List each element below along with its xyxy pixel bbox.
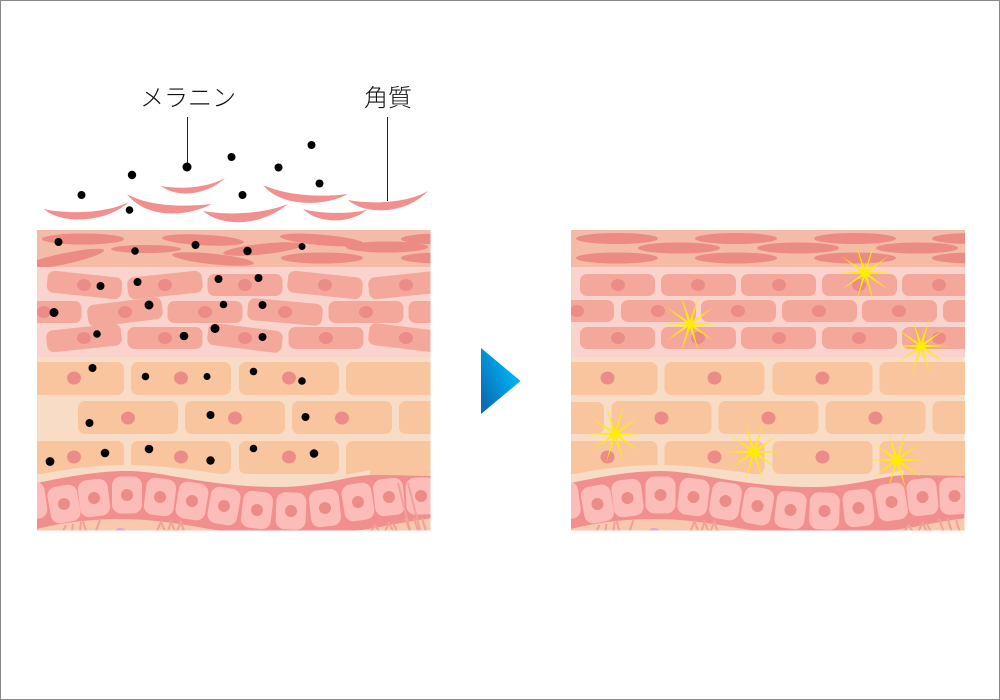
label: melanin: メラニン — [140, 85, 236, 112]
leader line: flakes — [386, 117, 388, 201]
extra granular cell at left edge — [571, 402, 604, 434]
horny layer band — [37, 230, 430, 267]
horny layer band — [571, 230, 1000, 267]
granular and basal layers — [571, 357, 965, 530]
prickle layer band with tilted cells — [37, 267, 430, 357]
arrow: before to after — [481, 348, 520, 414]
panel: clear skin (after) — [571, 230, 965, 530]
shedding corneum flakes — [44, 178, 428, 222]
granular and basal layers — [37, 357, 430, 530]
prickle layer band with orderly cells — [571, 267, 965, 357]
label: stratum corneum flakes: 角質 — [364, 85, 412, 112]
dermal fibres crossing basal cells — [398, 483, 420, 530]
panel: skin with melanin (before) — [37, 230, 430, 530]
sparkles — [587, 244, 949, 489]
leader line: melanin — [186, 117, 188, 167]
melanin dots — [46, 141, 323, 466]
